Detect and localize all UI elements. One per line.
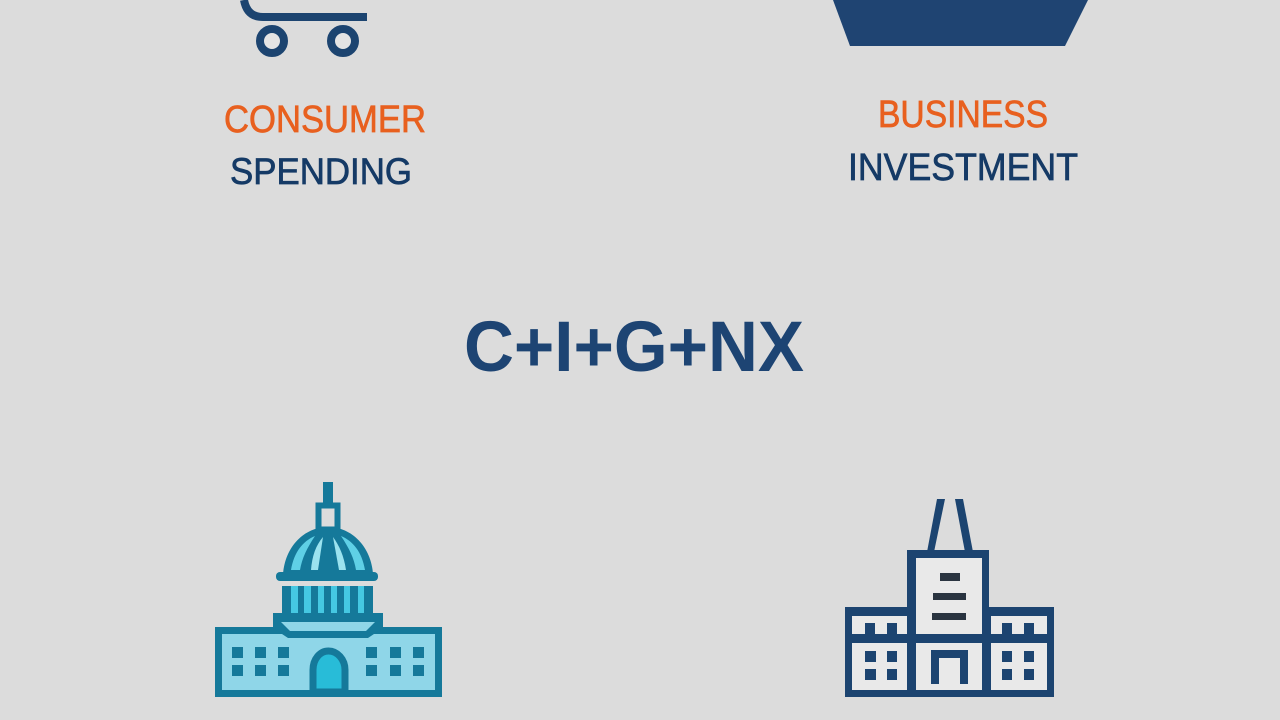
icon: net exports factory building xyxy=(845,499,1054,697)
heading: consumer spending xyxy=(224,99,426,192)
formula: C+I+G+NX xyxy=(464,308,804,387)
heading: business investment: BUSINESS xyxy=(878,94,1048,136)
heading: business investment: INVESTMENT xyxy=(848,147,1078,189)
heading: consumer spending: CONSUMER xyxy=(224,99,426,141)
heading: consumer spending: SPENDING xyxy=(230,151,412,192)
icon: business investment block xyxy=(833,0,1088,46)
heading: business investment xyxy=(848,94,1078,189)
icon: shopping cart xyxy=(244,0,367,53)
icon: government capitol building xyxy=(218,482,438,694)
